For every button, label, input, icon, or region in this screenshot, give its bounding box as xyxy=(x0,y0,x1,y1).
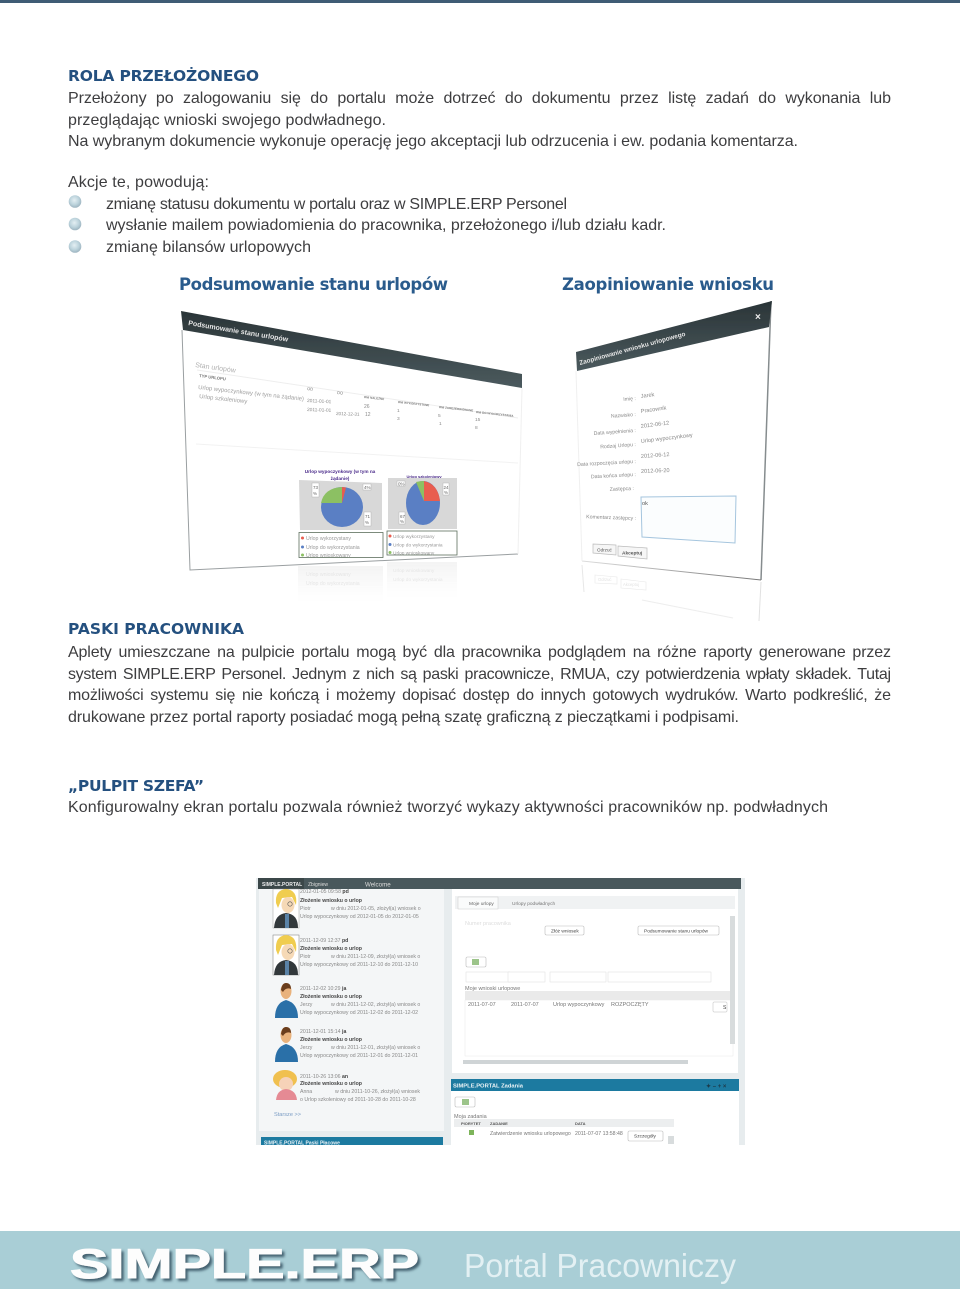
avatar: piotr xyxy=(273,935,299,975)
form fields: Data wypełnienia : xyxy=(593,428,636,437)
section: rola przelozonego xyxy=(68,66,891,256)
leave table: 15 xyxy=(475,417,481,423)
window title: Podsumowanie stanu urlopów xyxy=(188,320,289,344)
notification 1: w dniu 2012-01-05, złożył(a) wniosek o xyxy=(331,906,421,912)
paragraph: Na wybranym dokumencie wykonuje operację jego akceptacji lub odrzucenia i ew. podania komentarza. xyxy=(68,133,798,150)
notification 4: Jerzy xyxy=(300,1045,312,1051)
buttons: Akceptuj xyxy=(622,550,642,556)
vacation table: 2011-07-07 xyxy=(511,1002,539,1008)
leave table: DO xyxy=(337,390,343,396)
older link: Starsze >> xyxy=(274,1112,301,1118)
notification 2: Piotr xyxy=(300,954,311,960)
form fields: Urlop wypoczynkowy xyxy=(641,433,693,445)
heading: „PULPIT SZEFA” xyxy=(68,777,204,795)
form fields: Nazwisko : xyxy=(611,412,636,420)
notification 1 xyxy=(300,889,421,920)
pie chart: wypoczynkowy: % xyxy=(365,520,369,525)
form fields: 2012-06-12 xyxy=(641,421,670,430)
reflection: Urlop wnioskowany xyxy=(306,572,351,578)
paragraph: Konfigurowalny ekran portalu pozwala również tworzyć wykazy aktywności pracowników np. podwładnych xyxy=(68,799,828,816)
subheading: podsumowanie: Podsumowanie stanu urlopów xyxy=(179,275,448,294)
notification 4: w dniu 2011-12-01, złożył(a) wniosek o xyxy=(331,1045,420,1051)
form buttons: Złóż wniosek xyxy=(551,928,579,934)
panel: zadania: ✦ – + × xyxy=(706,1083,727,1090)
form fields: Komentarz zastępcy : xyxy=(586,514,636,522)
window title: Zaopiniowanie wniosku urlopowego xyxy=(579,331,686,367)
notification 3: Złożenie wniosku o urlop xyxy=(300,994,362,1000)
notification 5: Złożenie wniosku o urlop xyxy=(300,1081,362,1087)
notification 5 xyxy=(300,1074,420,1103)
tagline: Portal Pracowniczy xyxy=(464,1247,736,1284)
section: paski pracownika xyxy=(68,620,891,726)
reflection: Odrzuć xyxy=(598,577,612,582)
form fields: Jarek xyxy=(640,392,655,400)
reflection xyxy=(582,565,761,621)
form fields: Imię : xyxy=(623,396,636,403)
panel: zadania: ZADANIE xyxy=(490,1121,508,1126)
notification 2: Urlop wypoczynkowy od 2011-12-10 do 2011-12-10 xyxy=(300,962,418,968)
buttons xyxy=(593,544,647,559)
notification 5: Anna xyxy=(300,1089,312,1095)
pie chart: szkoleniowy: Urlop do wykorzystania xyxy=(393,542,443,548)
heading: ROLA PRZEŁOŻONEGO xyxy=(68,66,259,85)
paragraph: Przełożony po zalogowaniu się do portalu może dotrzeć do dokumentu przez listę zadań do wykonania lub xyxy=(68,90,891,107)
blue panel: paski pracownika: SIMPLE.PORTAL Paski Płacowe xyxy=(264,1140,340,1146)
bullet list: zmianę bilansów urlopowych xyxy=(106,239,311,256)
avatar: piotr xyxy=(273,889,299,928)
leave table: 2012-12-31 xyxy=(336,411,360,417)
pie chart: wypoczynkowy xyxy=(299,469,383,559)
panel: moje urlopy xyxy=(452,889,738,1073)
form buttons: Podsumowanie stanu urlopów xyxy=(644,928,709,934)
tabs: Urlopy podwładnych xyxy=(512,901,556,907)
notification 3: Jerzy xyxy=(300,1002,312,1008)
form fields: 2012-06-12 xyxy=(641,452,670,460)
pie chart: wypoczynkowy: żądanie) xyxy=(331,476,350,481)
reflection: Urlop wnioskowany xyxy=(393,568,435,574)
notification 2: Złożenie wniosku o urlop xyxy=(300,946,362,952)
comment box: ok xyxy=(642,501,648,507)
paragraph: możliwości systemu się nie kończą i możemy dopisać dostęp do innych gotowych wydruków. Warto podkreślić, że xyxy=(68,687,891,704)
leave table: 3 xyxy=(397,416,400,422)
pie chart: wypoczynkowy: Urlop wnioskowany xyxy=(306,553,351,559)
leave table: 1 xyxy=(439,421,442,427)
notification 4: 2011-12-01 15:14 ja xyxy=(300,1029,346,1035)
leave table: Urlop szkoleniowy xyxy=(199,394,248,405)
paragraph: drukowane przez portal raporty posiadać mogą pełną szatę graficzną z pieczątkami i podpisami. xyxy=(68,709,739,726)
notification 5: w dniu 2011-10-26, złożył(a) wniosek xyxy=(335,1089,420,1095)
panel: zadania: Szczegóły xyxy=(634,1134,656,1140)
pie chart: szkoleniowy: % xyxy=(400,519,404,524)
pie chart: szkoleniowy: 67 xyxy=(400,514,406,519)
bullet list: zmianę statusu dokumentu w portalu oraz w SIMPLE.ERP Personel xyxy=(106,196,567,213)
top navigation bar xyxy=(258,878,741,889)
paragraph xyxy=(68,90,891,150)
notification 2: 2011-12-09 12:37 pd xyxy=(300,938,348,944)
notification 2 xyxy=(300,938,420,968)
panel: zadania xyxy=(451,1079,739,1145)
leave table: 2011-01-01 xyxy=(307,407,332,414)
footer band xyxy=(0,1231,960,1289)
section: pulpit szefa xyxy=(68,777,828,816)
leave table: OD xyxy=(307,386,313,392)
pie chart: wypoczynkowy: Urlop wykorzystany xyxy=(306,536,351,542)
vacation table: 2011-07-07 xyxy=(468,1002,496,1008)
leave table: 5 xyxy=(438,413,441,419)
paragraph: Aplety umieszczane na pulpicie portalu mogą być dla pracownika podglądem na różne raporty generowane przez xyxy=(68,644,891,661)
vacation table: S xyxy=(723,1005,727,1011)
pie chart: szkoleniowy: 0% xyxy=(398,482,405,486)
subheading: zaopiniowanie: Zaopiniowanie wniosku xyxy=(562,275,774,294)
leave table: DNI WYKORZYSTANE xyxy=(398,400,429,407)
pie chart: szkoleniowy: % xyxy=(444,490,448,495)
form fields: Pracownik xyxy=(640,405,667,415)
form fields: 2012-06-20 xyxy=(641,468,670,475)
top navigation bar: SIMPLE.PORTAL xyxy=(262,882,302,888)
notification 3 xyxy=(300,986,420,1016)
screenshot: zaopiniowanie wniosku xyxy=(576,301,772,621)
notification 1: Piotr xyxy=(300,906,311,912)
notification 5: o Urlop szkoleniowy od 2011-10-28 do 2011-10-28 xyxy=(300,1097,416,1103)
notification 3: 2011-12-02 10:29 ja xyxy=(300,986,346,992)
pie chart: wypoczynkowy: % xyxy=(313,491,317,496)
notification 4: Złożenie wniosku o urlop xyxy=(300,1037,362,1043)
reflection: Urlop do wykorzystania xyxy=(393,577,443,583)
leave table: Urlop wypoczynkowy (w tym na żądanie) xyxy=(198,385,304,403)
pie chart: wypoczynkowy: Urlop wypoczynkowy (w tym na xyxy=(305,469,376,474)
notification 1: 2012-01-05 09:58 pd xyxy=(300,889,349,895)
tabs xyxy=(455,896,735,909)
leave table: TYP URLOPU xyxy=(199,373,226,382)
close icon: × xyxy=(755,312,761,323)
window header xyxy=(576,301,772,371)
leave table: 1 xyxy=(397,408,400,414)
leave table: Stan urlopów xyxy=(195,362,237,375)
pie chart: szkoleniowy xyxy=(387,474,457,556)
paragraph: system SIMPLE.ERP Personel. Jednym z nich są paski pracownicze, RMUA, czy potwierdzenia wpłaty składek. Tutaj xyxy=(68,666,891,683)
pie chart: wypoczynkowy: 73 xyxy=(313,485,319,490)
buttons: Odrzuć xyxy=(597,548,613,552)
screenshot: podsumowanie stanu urlopow xyxy=(181,311,522,602)
comment box xyxy=(641,496,736,543)
form fields: Zastępca : xyxy=(610,486,634,493)
bullet list: wysłanie mailem powiadomienia do pracownika, przełożonego i/lub działu kadr. xyxy=(105,217,666,234)
leave table: DNI NALEŻNE xyxy=(364,394,384,401)
pie chart: wypoczynkowy: Urlop do wykorzystania xyxy=(306,545,360,551)
bullet list xyxy=(69,195,666,256)
window header xyxy=(181,311,522,388)
avatar: jerzy xyxy=(275,1027,298,1062)
vacation table: Urlop wypoczynkowy xyxy=(553,1002,605,1008)
vacation table: Moje wnioski urlopowe xyxy=(465,986,520,992)
heading: PASKI PRACOWNIKA xyxy=(68,620,244,638)
notification 4: Urlop wypoczynkowy od 2011-12-01 do 2011-12-01 xyxy=(300,1053,418,1059)
avatar: anna xyxy=(273,1070,297,1100)
panel: zadania: 2011-07-07 13:58:48 xyxy=(575,1131,623,1137)
logo: SIMPLE.ERP xyxy=(70,1240,419,1287)
paragraph xyxy=(68,644,891,726)
notification 3: w dniu 2011-12-02, złożył(a) wniosek o xyxy=(331,1002,420,1008)
leave table: DNI DO WYKORZYSTANIA xyxy=(476,410,515,418)
notification 3: Urlop wypoczynkowy od 2011-12-02 do 2011-12-02 xyxy=(300,1010,418,1016)
leave table: 8 xyxy=(475,425,478,431)
form fields xyxy=(577,392,693,522)
avatar: jerzy xyxy=(275,983,298,1018)
screenshot: portal dashboard xyxy=(256,878,745,1146)
pie chart: szkoleniowy: Urlop wykorzystany xyxy=(393,534,435,540)
reflection: Urlop do wykorzystania xyxy=(306,581,360,587)
leave table: 2011-01-01 xyxy=(307,398,332,405)
top navigation bar: Welcome xyxy=(365,882,391,888)
panel: zadania: PIORYTET xyxy=(461,1121,481,1126)
panel: zadania: Moja zadania xyxy=(454,1114,488,1120)
leave table: 12 xyxy=(365,412,371,418)
form fields: Rodzaj Urlopu : xyxy=(600,442,636,450)
pie chart: wypoczynkowy: 4% xyxy=(364,485,371,490)
blue panel: paski pracownika xyxy=(261,1137,443,1146)
notification 4 xyxy=(300,1029,420,1059)
vacation table: ROZPOCZĘTY xyxy=(611,1002,649,1008)
notification panel xyxy=(259,889,444,1131)
paragraph: przeglądając wnioski swojego podwładnego. xyxy=(68,112,386,129)
reflection xyxy=(298,562,457,602)
pie chart: szkoleniowy: Urlop szkoleniowy xyxy=(406,474,442,479)
list intro: Akcje te, powodują: xyxy=(68,174,209,191)
pie chart: wypoczynkowy: 71 xyxy=(365,514,371,519)
panel: zadania: SIMPLE.PORTAL Zadania xyxy=(453,1084,524,1090)
form fields: Data końca urlopu : xyxy=(591,472,636,480)
notification 5: 2011-10-26 13:06 an xyxy=(300,1074,348,1080)
top navigation bar: Zbigniew xyxy=(308,882,328,888)
scrollbars xyxy=(463,916,735,1064)
tabs: Moje urlopy xyxy=(469,901,494,907)
panel: zadania: Zatwierdzenie wniosku urlopowego xyxy=(490,1131,571,1137)
leave table: 26 xyxy=(364,404,370,410)
pie chart: szkoleniowy: 24 xyxy=(444,485,449,490)
leave table: DNI ZAREZERWOWANE xyxy=(439,405,473,413)
form buttons: Numer pracownika xyxy=(465,921,512,927)
notification 2: w dniu 2011-12-09, złożył(a) wniosek o xyxy=(331,954,420,960)
form fields: Data rozpoczęcia urlopu : xyxy=(577,459,636,468)
vacation table xyxy=(465,972,733,1056)
panel: zadania: DATA xyxy=(575,1121,586,1126)
top bar xyxy=(0,0,960,3)
form buttons xyxy=(465,921,719,967)
leave table xyxy=(195,362,518,463)
pie chart: szkoleniowy: Urlop wnioskowany xyxy=(393,550,435,556)
notification 1: Złożenie wniosku o urlop xyxy=(300,898,362,904)
notification 1: Urlop wypoczynkowy od 2012-01-05 do 2012-01-05 xyxy=(300,914,419,920)
reflection: Akceptuj xyxy=(623,582,639,587)
